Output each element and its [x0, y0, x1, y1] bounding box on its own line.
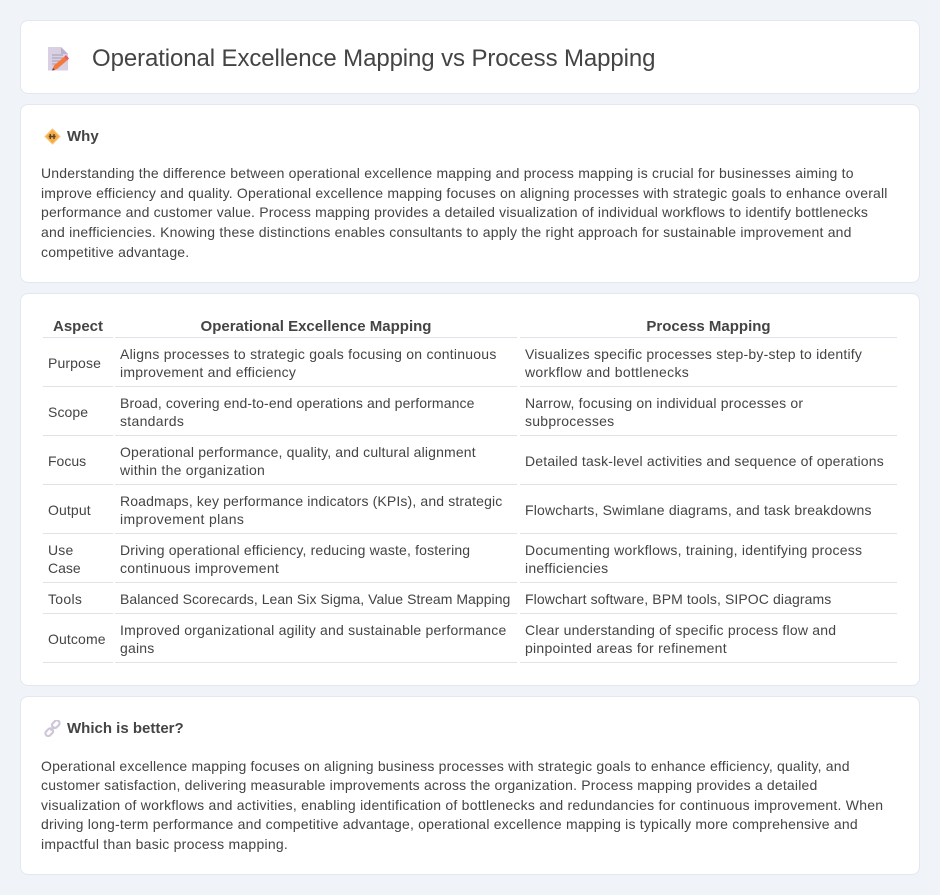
text block: which is better: Operational excellence mapping focuses on aligning business processes with strategic goals to enhance efficiency, quality, and [41, 758, 850, 774]
row: use case: Driving operational efficiency, reducing waste, fostering [120, 542, 470, 558]
row: focus: Detailed task-level activities and sequence of operations [525, 453, 884, 469]
text block: why [41, 165, 888, 260]
title: Operational Excellence Mapping vs Process Mapping [92, 45, 655, 72]
panel: why [20, 104, 920, 283]
row: focus: within the organization [120, 462, 265, 478]
heading: which is better: Which is better? [67, 720, 184, 737]
text block: which is better: driving long-term performance and competitive advantage, operational excellence mapping is typically more comprehensive and [41, 816, 858, 832]
row: purpose: improvement and efficiency [120, 364, 296, 380]
row: focus: Operational performance, quality, and cultural alignment [120, 444, 476, 460]
text block: which is better: visualization of workflows and activities, enabling identification of bottlenecks and redundancies for continuous improvement. When [41, 797, 883, 813]
row: scope: Broad, covering end-to-end operations and performance [120, 395, 474, 411]
row: output: improvement plans [120, 511, 244, 527]
row: output: Flowcharts, Swimlane diagrams, and task breakdowns [525, 502, 872, 518]
icon: document with pencil [48, 47, 69, 70]
row: outcome: Clear understanding of specific process flow and [525, 622, 836, 638]
row: outcome: Improved organizational agility and sustainable performance [120, 622, 507, 638]
row: outcome [43, 622, 897, 663]
row: scope: Narrow, focusing on individual processes or [525, 395, 803, 411]
row: use case: Use [48, 542, 74, 558]
row: tools [43, 591, 897, 614]
table header [43, 318, 897, 338]
row: use case: continuous improvement [120, 560, 279, 576]
icon: warning diamond [44, 128, 61, 145]
row: purpose: Purpose [48, 355, 101, 371]
panel: comparison table [20, 293, 920, 686]
row: tools: Flowchart software, BPM tools, SIPOC diagrams [525, 591, 831, 607]
text block: why: improve efficiency and quality. Operational excellence mapping focuses on aligning processes with strategic goals to enhance overall [41, 185, 888, 201]
row: output: Roadmaps, key performance indicators (KPIs), and strategic [120, 493, 502, 509]
row: outcome: pinpointed areas for refinement [525, 640, 727, 656]
row: outcome: Outcome [48, 631, 106, 647]
panel: header [20, 20, 920, 94]
heading: why: Why [67, 128, 99, 145]
row: outcome: gains [120, 640, 154, 656]
row: purpose: Aligns processes to strategic goals focusing on continuous [120, 346, 497, 362]
row: tools: Balanced Scorecards, Lean Six Sigma, Value Stream Mapping [120, 591, 510, 607]
text block: why: and inefficiencies. Knowing these distinctions enables consultants to apply the right approach for sustainable improvement and [41, 224, 852, 240]
row: purpose [43, 346, 897, 387]
row: scope: standards [120, 413, 184, 429]
row: purpose: workflow and bottlenecks [525, 364, 689, 380]
row: purpose: Visualizes specific processes step-by-step to identify [525, 346, 862, 362]
row: use case [43, 542, 897, 583]
row: focus [43, 444, 897, 485]
table header: Process Mapping [646, 318, 771, 335]
row: output: Output [48, 502, 91, 518]
text block: which is better [41, 758, 883, 852]
row: focus: Focus [48, 453, 86, 469]
icon: link [44, 720, 61, 737]
text block: which is better: customer satisfaction, delivering measurable improvements across the organization. Process mapping provides a detailed [41, 777, 817, 793]
text block: which is better: impactful than basic process mapping. [41, 836, 288, 852]
text block: why: competitive advantage. [41, 244, 189, 260]
row: use case: Case [48, 560, 81, 576]
row: output [43, 493, 897, 534]
row: scope: subprocesses [525, 413, 614, 429]
panel: which is better [20, 696, 920, 875]
row: use case: inefficiencies [525, 560, 608, 576]
row: use case: Documenting workflows, training, identifying process [525, 542, 862, 558]
row: scope [43, 395, 897, 436]
text block: why: performance and customer value. Process mapping provides a detailed visualization of individual workflows to identify bottlenecks [41, 204, 868, 220]
row: scope: Scope [48, 404, 88, 420]
row: tools: Tools [48, 591, 82, 607]
table header: Operational Excellence Mapping [201, 318, 431, 335]
table header: Aspect [53, 318, 103, 335]
text block: why: Understanding the difference between operational excellence mapping and process mapping is crucial for businesses aiming to [41, 165, 854, 181]
